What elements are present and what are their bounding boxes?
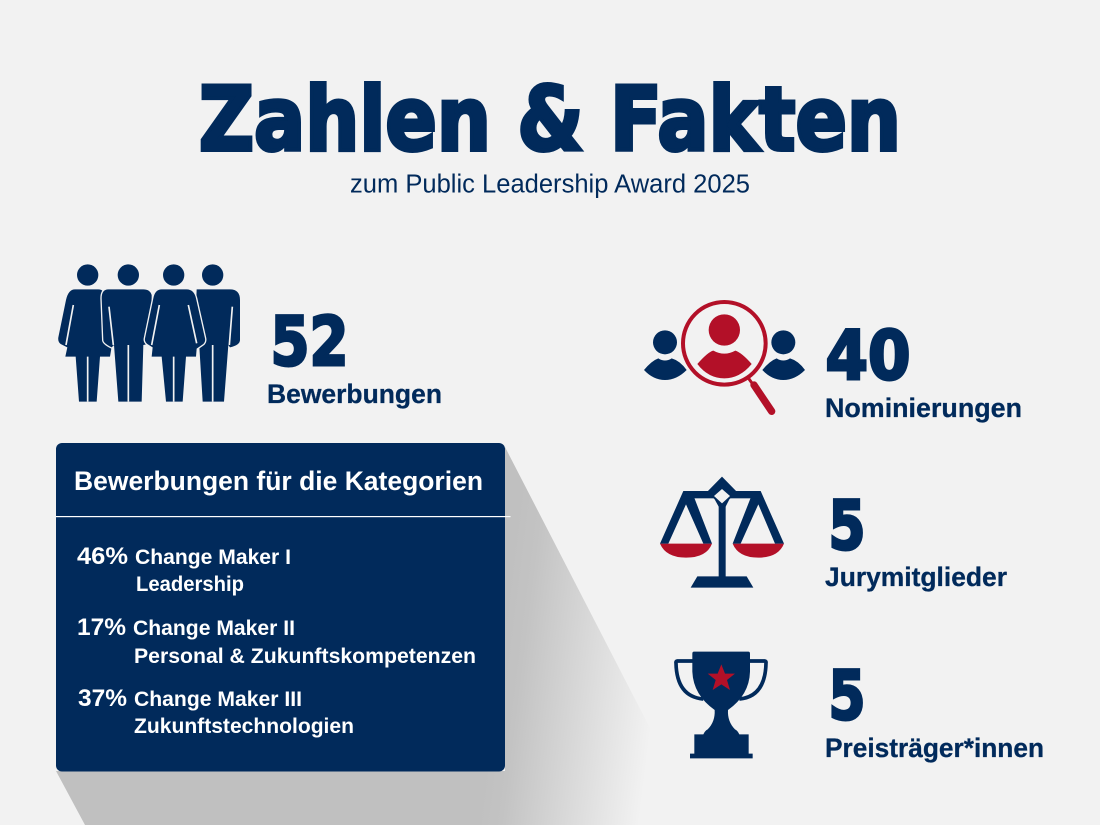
label: Jurymitglieder: Jurymitglieder (825, 562, 1007, 592)
category: Change Maker III: 37% (78, 685, 127, 712)
category: Change Maker III (78, 685, 354, 738)
panel shadow (56, 447, 700, 825)
icon: group of people (58, 264, 240, 402)
subtitle: zum Public Leadership Award 2025 (350, 170, 750, 198)
number: 5 jury: 5 (828, 487, 866, 566)
category: Change Maker II: Personal & Zukunftskompetenzen (134, 644, 476, 668)
number: 40: 40 (826, 317, 910, 396)
category: Change Maker II: Change Maker II (133, 616, 295, 640)
category: Change Maker I: Leadership (136, 572, 244, 596)
number: 5 winners: 5 (828, 657, 866, 736)
category: Change Maker III: Change Maker III (134, 687, 302, 711)
title: Zahlen & Fakten (199, 68, 901, 171)
label: Preisträger*innen: Preisträger*innen (825, 733, 1044, 763)
icon: scales (660, 477, 784, 588)
category: Change Maker III: Zukunftstechnologien (134, 714, 354, 738)
label: Bewerbungen: Bewerbungen (267, 379, 442, 409)
label: Nominierungen: Nominierungen (825, 393, 1022, 423)
panel heading: Bewerbungen für die Kategorien (74, 466, 483, 496)
category: Change Maker II: 17% (77, 614, 126, 641)
number: 52: 52 (270, 303, 348, 382)
category: Change Maker I: 46% (77, 543, 128, 570)
category: Change Maker II (77, 614, 476, 668)
icon: magnifier over people (644, 302, 805, 411)
panel: categories (56, 443, 510, 772)
icon: trophy (676, 652, 766, 758)
category: Change Maker I (77, 543, 291, 596)
category: Change Maker I: Change Maker I (135, 545, 291, 569)
